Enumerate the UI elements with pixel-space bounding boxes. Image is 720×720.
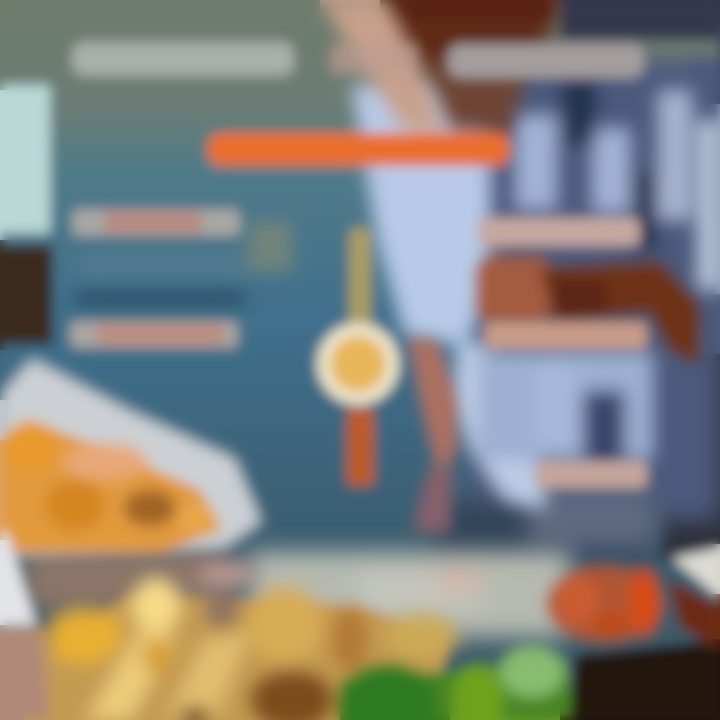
white cloth, lower left (0, 530, 60, 720)
panel: person in plaid shirt (320, 0, 720, 560)
right labels (478, 218, 647, 488)
table surface (25, 550, 570, 637)
plaid stripes (352, 80, 720, 510)
bowl with red sauce (547, 548, 720, 720)
green herbs (338, 646, 575, 720)
left label sublines (75, 222, 292, 304)
timeline: connector and node (317, 228, 399, 486)
left labels (70, 209, 240, 348)
hair and head (320, 0, 560, 135)
orange title pill (208, 133, 510, 166)
title (72, 42, 644, 78)
left edge objects (0, 85, 53, 345)
panel: basket with orange food (0, 358, 262, 556)
fries (46, 561, 458, 720)
hand and arm (408, 256, 700, 532)
